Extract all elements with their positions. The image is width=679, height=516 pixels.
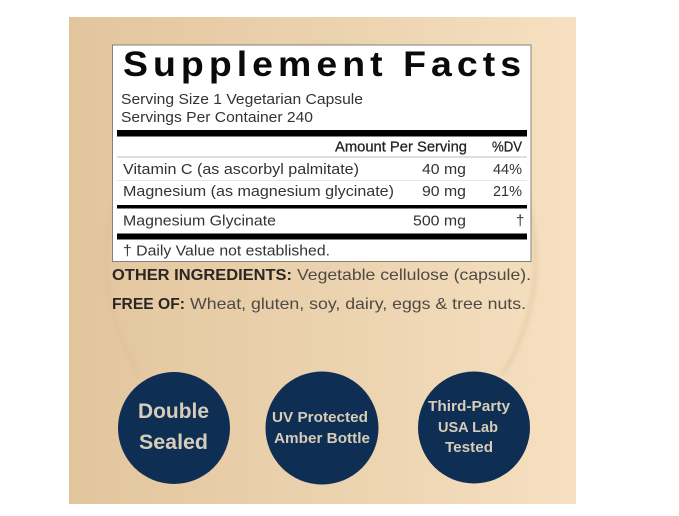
free of text: FREE OF:	[112, 296, 185, 313]
row: magnesium: 90 mg	[422, 183, 466, 200]
background panel	[69, 17, 576, 504]
panel: supplement facts label	[112, 44, 531, 262]
row: magnesium glycinate: †	[516, 212, 524, 230]
row: vitamin c: 40 mg	[422, 161, 466, 178]
badge: double sealed: Sealed	[139, 431, 208, 454]
badge: third-party usa lab tested: Third-Party	[428, 398, 511, 415]
badge: third-party usa lab tested: USA Lab	[438, 419, 498, 436]
top thick rule	[117, 130, 527, 136]
badge: double sealed	[118, 372, 230, 484]
badge: uv protected amber bottle	[266, 372, 378, 484]
row: magnesium glycinate: Magnesium Glycinate	[123, 212, 276, 230]
table header: %DV	[492, 140, 522, 156]
row: magnesium: 21%	[493, 183, 522, 200]
badge: third-party usa lab tested	[418, 372, 530, 484]
free of text: Wheat, gluten, soy, dairy, eggs & tree nuts.	[190, 296, 526, 313]
badge: uv protected amber bottle: UV Protected	[272, 409, 368, 426]
label box	[112, 45, 531, 262]
serving information: Servings Per Container 240	[121, 109, 313, 126]
serving information	[121, 91, 363, 126]
other ingredients text: OTHER INGREDIENTS:	[112, 267, 292, 284]
badge: third-party usa lab tested: Tested	[445, 439, 493, 456]
row: magnesium glycinate: 500 mg	[413, 212, 466, 230]
row: magnesium glycinate	[123, 212, 524, 230]
serving information: Serving Size 1 Vegetarian Capsule	[121, 91, 363, 108]
row: magnesium: Magnesium (as magnesium glycinate)	[123, 183, 394, 200]
other ingredients text	[112, 267, 531, 284]
row: vitamin c: Vitamin C (as ascorbyl palmitate)	[123, 161, 359, 178]
row: vitamin c	[123, 161, 522, 178]
footnote: † Daily Value not established.	[123, 242, 330, 260]
table header: Amount Per Serving	[335, 140, 467, 156]
other ingredients text: Vegetable cellulose (capsule).	[297, 267, 531, 284]
badge: double sealed: Double	[138, 400, 209, 423]
title: Supplement Facts	[123, 44, 521, 84]
row: vitamin c: 44%	[493, 161, 522, 178]
table header	[335, 140, 522, 156]
badge: uv protected amber bottle: Amber Bottle	[274, 430, 370, 447]
row: magnesium	[123, 183, 522, 200]
decorative arc	[106, 45, 536, 375]
